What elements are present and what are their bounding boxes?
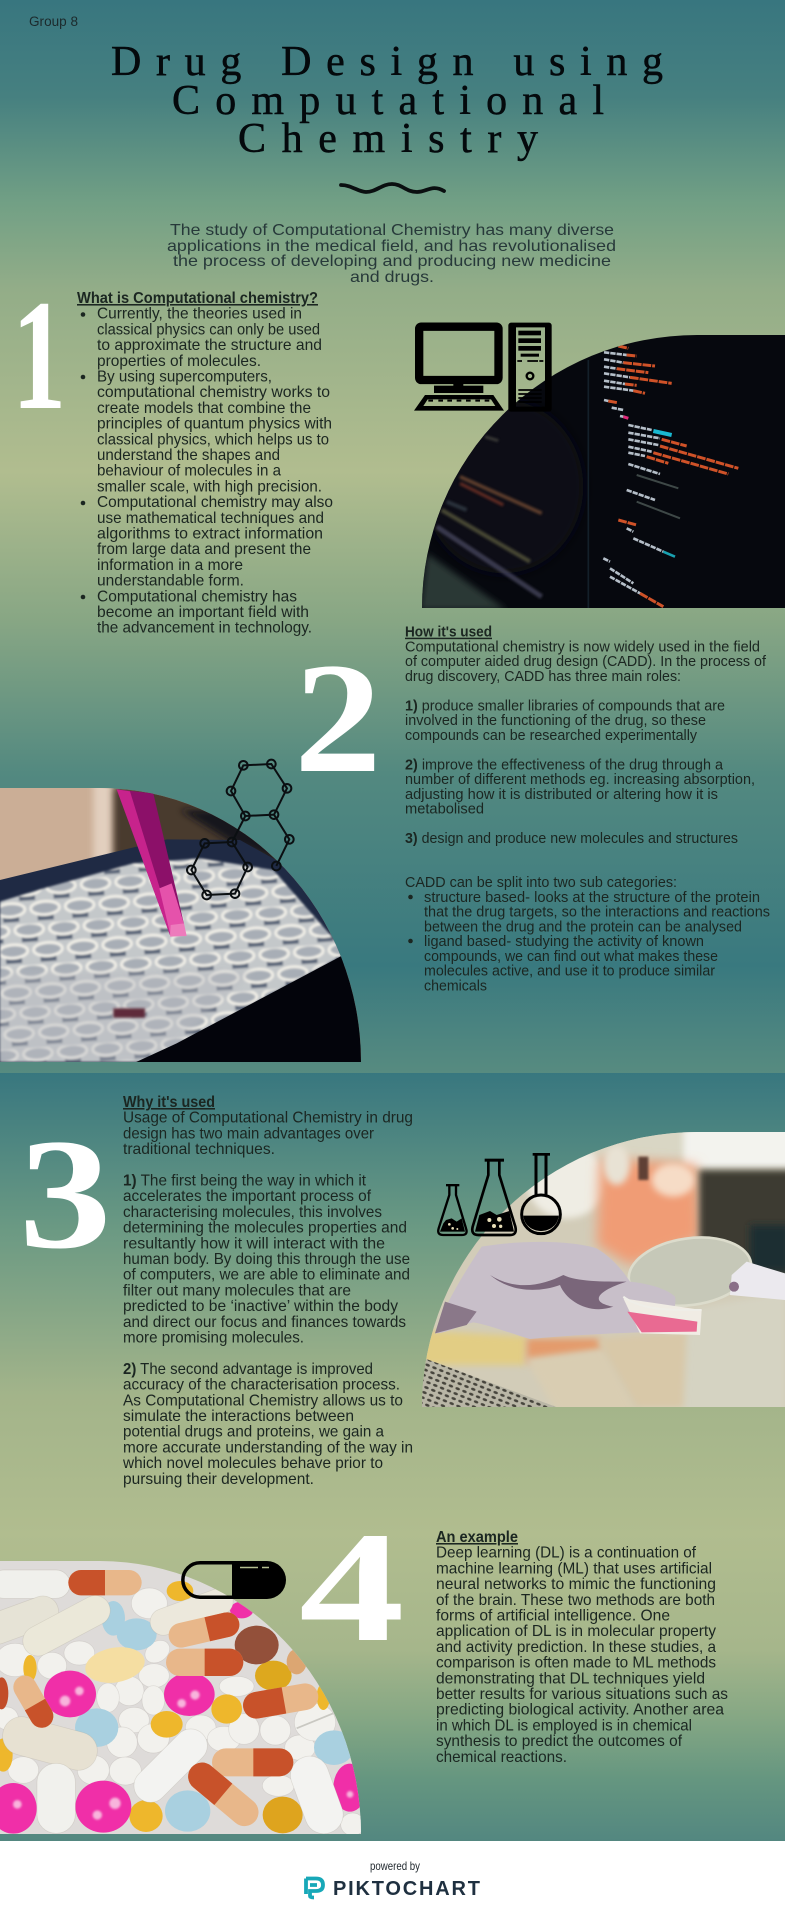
photo: assorted pills xyxy=(0,1555,375,1840)
section 1 bullets: understandable form. xyxy=(97,573,244,590)
title: Chemistry xyxy=(238,116,538,162)
section number 3: 3 xyxy=(19,1107,111,1282)
advantage 1: of computers, we are able to eliminate and xyxy=(123,1267,410,1284)
icon: capsule xyxy=(183,1561,286,1599)
advantage 1: and direct our focus and finances towards xyxy=(123,1314,406,1331)
section 3 intro: Usage of Computational Chemistry in drug xyxy=(123,1110,413,1127)
advantage 1: resultantly how it will interact with the xyxy=(123,1235,385,1252)
advantage 1 xyxy=(123,1172,410,1346)
CADD sub categories: CADD can be split into two sub categories: xyxy=(405,875,677,891)
section number 4: 4 xyxy=(299,1500,405,1675)
section number 2: 2 xyxy=(294,631,382,806)
intro paragraph xyxy=(167,222,616,286)
section 2 intro xyxy=(405,639,767,685)
wavy divider xyxy=(341,184,444,192)
section 2 text: How it's used xyxy=(405,625,770,994)
section 1 bullets: classical physics can only be used xyxy=(97,321,320,338)
section 1 bullets: properties of molecules. xyxy=(97,353,261,370)
section 3 text: Why it's used xyxy=(122,1094,413,1488)
section 1 bullets xyxy=(81,306,333,637)
section 1 bullets: the advancement in technology. xyxy=(97,620,312,637)
footer panel background xyxy=(0,1841,785,1920)
intro paragraph: and drugs. xyxy=(350,269,434,286)
section 2 heading: How it's used xyxy=(405,625,492,641)
footer: Piktochart logo xyxy=(306,1878,480,1900)
section 4 paragraph: better results for various situations such as xyxy=(436,1686,728,1703)
footer: powered by: powered by xyxy=(370,1859,420,1873)
yellow tablets xyxy=(0,1581,330,1833)
section 1 bullets: understand the shapes and xyxy=(97,447,280,464)
icon: desktop computer xyxy=(414,323,552,412)
role 2: adjusting how it is distributed or altering how it is xyxy=(405,787,718,803)
section number 1: 1 xyxy=(12,268,66,443)
logo wordmark: PIKTOCHART xyxy=(333,1878,480,1900)
CADD sub categories: compounds, we can find out what makes these xyxy=(424,949,718,965)
advantage 1: predicted to be ‘inactive’ within the body xyxy=(123,1298,398,1315)
CADD sub categories: structure based- looks at the structure of the protein xyxy=(424,890,760,906)
white round tablets xyxy=(0,1588,365,1836)
section 4 paragraph xyxy=(436,1545,728,1766)
advantage 2: potential drugs and proteins, we gain a xyxy=(123,1424,384,1441)
section 1 text: What is Computational chemistry xyxy=(77,290,333,637)
section 1 bullets: algorithms to extract information xyxy=(97,526,323,542)
intro paragraph: The study of Computational Chemistry has many diverse xyxy=(170,222,614,239)
logo mark xyxy=(306,1878,323,1898)
title: Drug Design using xyxy=(111,39,663,85)
section 4 paragraph: Deep learning (DL) is a continuation of xyxy=(436,1545,697,1562)
section 3 intro: traditional techniques. xyxy=(123,1141,275,1158)
role 2: 2) improve the effectiveness of the drug through a xyxy=(405,757,724,773)
title: Computational xyxy=(172,78,604,124)
section 4 paragraph: and activity prediction. In these studies, a xyxy=(436,1639,716,1656)
icon: molecule hexagons xyxy=(187,760,294,899)
section 1 heading: What is Computational chemistry? xyxy=(77,290,318,307)
section 4 paragraph: machine learning (ML) that uses artificial xyxy=(436,1560,712,1577)
CADD sub categories xyxy=(405,875,770,994)
CADD sub categories: ligand based- studying the activity of known xyxy=(424,934,704,950)
section 1 bullets: information in a more xyxy=(97,557,243,574)
advantage 1: human body. By doing this through the use xyxy=(123,1251,410,1268)
section 1 bullets: Computational chemistry has xyxy=(97,588,297,605)
role 1: involved in the functioning of the drug, so these xyxy=(405,713,706,729)
section 2 intro: drug discovery, CADD has three main roles: xyxy=(405,669,681,685)
section 4 paragraph: in which DL is employed is in chemical xyxy=(436,1717,692,1734)
section 1 bullets: Computational chemistry may also xyxy=(97,494,333,511)
section 1 bullets: smaller scale, with high precision. xyxy=(97,478,322,495)
light blue tablets xyxy=(75,1601,354,1832)
section 1 bullets: By using supercomputers, xyxy=(97,368,272,386)
advantage 1: more promising molecules. xyxy=(123,1330,304,1346)
CADD sub categories: molecules active, and use it to produce similar xyxy=(424,964,715,980)
CADD sub categories: between the drug and the protein can be analysed xyxy=(424,919,742,935)
advantage 2: more accurate understanding of the way in xyxy=(123,1439,413,1456)
section 1 bullets: behaviour of molecules in a xyxy=(97,463,281,480)
advantage 1: determining the molecules properties and xyxy=(123,1220,407,1237)
CADD sub categories: chemicals xyxy=(424,978,487,994)
advantage 2: pursuing their development. xyxy=(123,1471,314,1488)
CADD sub categories: that the drug targets, so the interactions and reactions xyxy=(424,905,770,921)
photo: gloved hand holding petri dish xyxy=(422,1132,785,1407)
role 2: number of different methods eg. increasing absorption, xyxy=(405,772,755,788)
round flask xyxy=(522,1153,560,1234)
advantage 1: filter out many molecules that are xyxy=(123,1282,351,1299)
small flask xyxy=(438,1184,467,1235)
section 2 intro: of computer aided drug design (CADD). In the process of xyxy=(405,654,767,670)
intro paragraph: the process of developing and producing new medicine xyxy=(173,253,611,270)
section 1 bullets: to approximate the structure and xyxy=(97,337,322,354)
section 1 bullets: use mathematical techniques and xyxy=(97,510,324,527)
section 1 bullets: principles of quantum physics with xyxy=(97,416,332,433)
magenta tablets xyxy=(0,1602,367,1834)
long white pills xyxy=(0,1570,349,1839)
section 1 bullets: classical physics, which helps us to xyxy=(97,431,329,448)
advantage 1: 1) The first being the way in which it xyxy=(123,1172,367,1190)
advantage 1: characterising molecules, this involves xyxy=(123,1204,382,1221)
role 3: 3) design and produce new molecules and structures xyxy=(405,831,738,847)
section 2 intro: Computational chemistry is now widely used in the field xyxy=(405,639,760,655)
icon: chemistry flasks xyxy=(438,1153,560,1235)
section 4 paragraph: comparison is often made to ML methods xyxy=(436,1655,716,1672)
section 4 text: An example xyxy=(436,1529,728,1766)
role 2: metabolised xyxy=(405,802,484,818)
intro paragraph: applications in the medical field, and has revolutionalised xyxy=(167,238,616,255)
section 4 paragraph: predicting biological activity. Another area xyxy=(436,1702,724,1719)
background: lower gradient panel xyxy=(0,1073,785,1841)
advantage 2 xyxy=(122,1361,413,1488)
section 1 bullets: from large data and present the xyxy=(97,541,311,558)
role 1 xyxy=(405,698,725,744)
photo: pipette over test tube tray xyxy=(0,780,375,1063)
section 1 bullets: Currently, the theories used in xyxy=(97,306,302,323)
advantage 1: accelerates the important process of xyxy=(123,1188,372,1205)
section 4 paragraph: synthesis to predict the outcomes of xyxy=(436,1733,683,1750)
brown tablet xyxy=(235,1626,279,1664)
section 4 paragraph: of the brain. These two methods are both xyxy=(436,1592,715,1609)
advantage 2: which novel molecules behave prior to xyxy=(122,1455,383,1472)
section 1 bullets: become an important field with xyxy=(97,604,309,621)
role 1: compounds can be researched experimentally xyxy=(405,728,698,744)
section 3 intro xyxy=(123,1110,413,1158)
role 2 xyxy=(405,757,755,818)
photo: code on dark screen xyxy=(422,335,785,608)
conical flask xyxy=(472,1159,516,1235)
section 1 bullets: computational chemistry works to xyxy=(97,384,330,401)
advantage 2: 2) The second advantage is improved xyxy=(123,1361,373,1378)
section 4 paragraph: chemical reactions. xyxy=(436,1749,567,1766)
section 4 paragraph: neural networks to mimic the functioning xyxy=(436,1576,716,1593)
advantage 2: accuracy of the characterisation process. xyxy=(123,1377,400,1394)
background: upper gradient panel xyxy=(0,0,785,1073)
section 4 heading: An example xyxy=(436,1529,518,1546)
section 4 paragraph: application of DL is in molecular property xyxy=(436,1623,716,1640)
section 4 paragraph: demonstrating that DL techniques yield xyxy=(436,1670,705,1687)
title xyxy=(111,39,663,162)
section 1 bullets: create models that combine the xyxy=(97,400,311,417)
section 3 heading: Why it's used xyxy=(123,1094,215,1111)
group label: Group 8 xyxy=(29,14,78,29)
section 4 paragraph: forms of artificial intelligence. One xyxy=(436,1608,670,1624)
cream tablet xyxy=(85,1647,145,1683)
advantage 2: simulate the interactions between xyxy=(123,1408,354,1425)
role 1: 1) produce smaller libraries of compounds that are xyxy=(405,698,725,714)
section 3 intro: design has two main advantages over xyxy=(123,1125,374,1142)
advantage 2: As Computational Chemistry allows us to xyxy=(123,1392,403,1409)
two-tone capsules xyxy=(9,1570,320,1832)
